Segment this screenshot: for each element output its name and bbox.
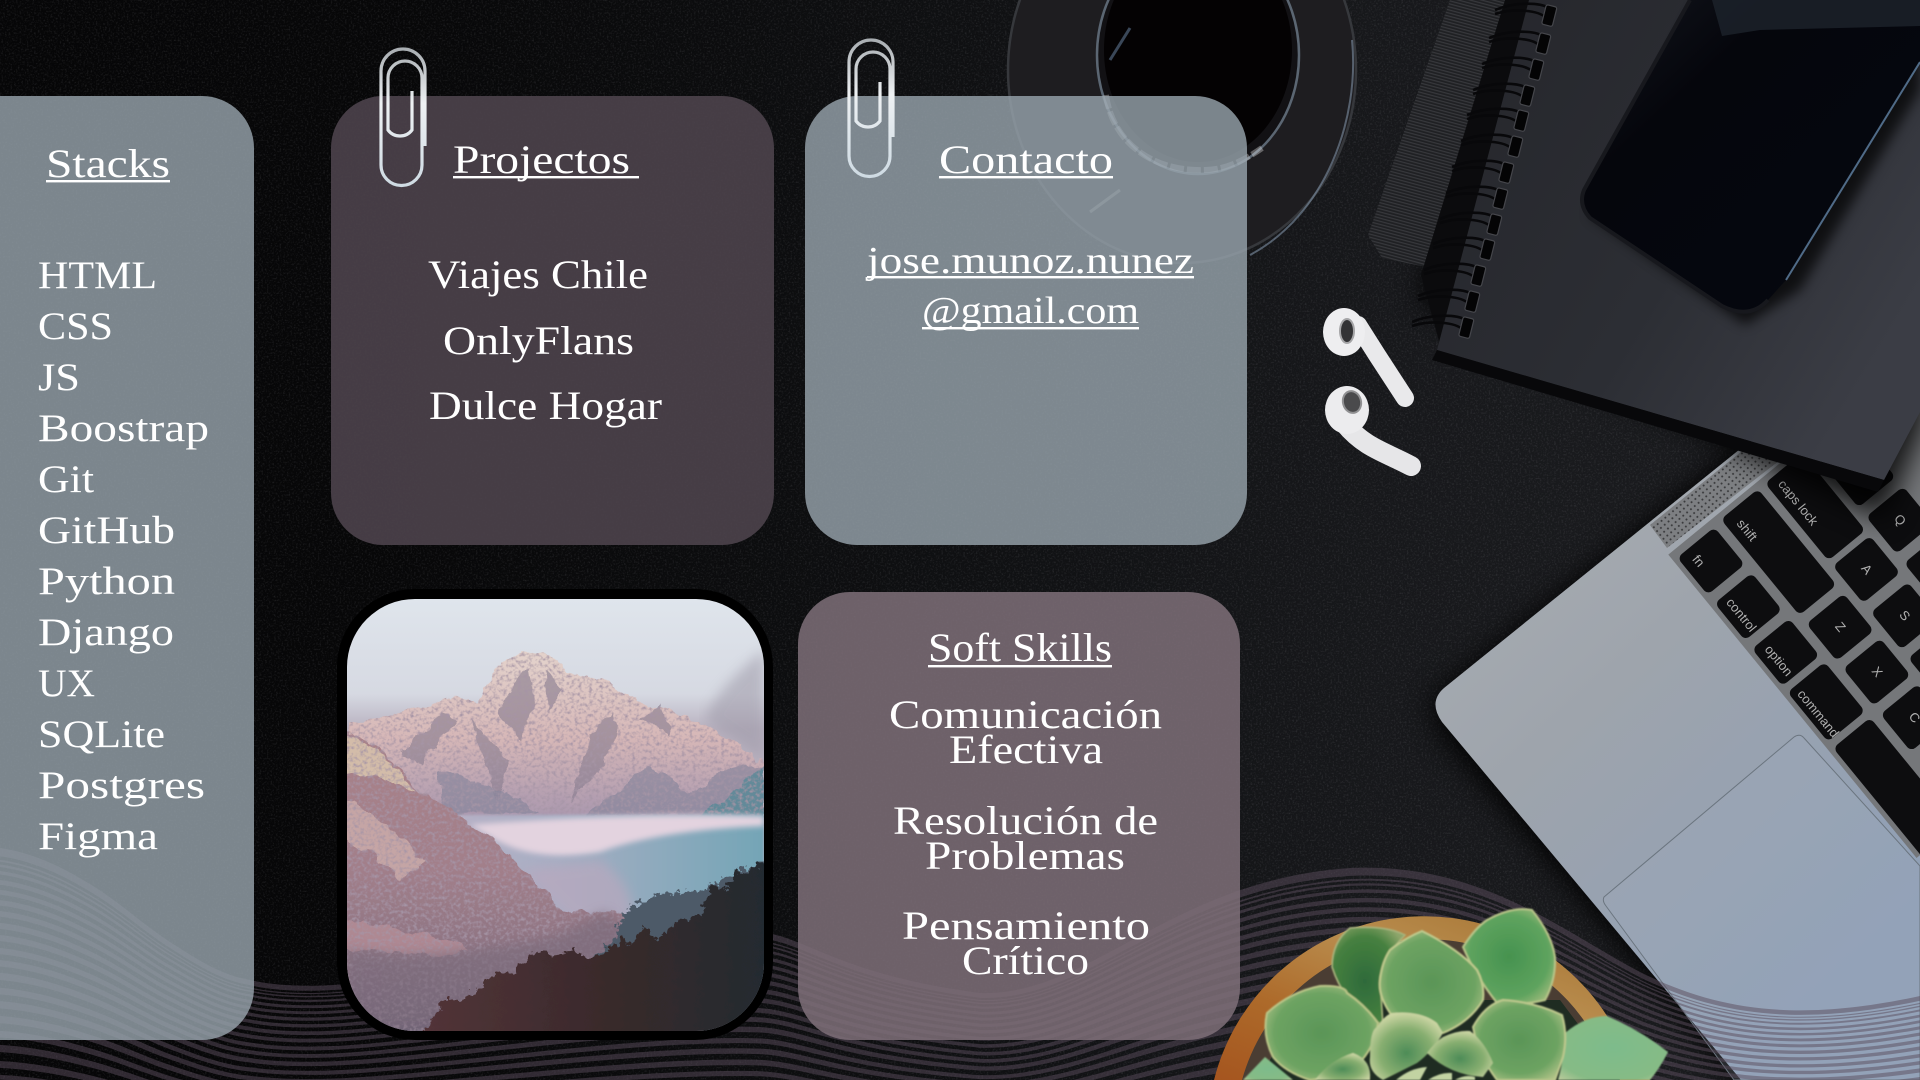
distant tree line xyxy=(590,860,764,1031)
keyboard keys: shift xyxy=(1734,516,1761,544)
panel: Projectos xyxy=(331,96,774,545)
photo: laptop with keyboard and trackpad xyxy=(1430,340,1920,1080)
heading: Contacto: Contacto xyxy=(939,137,1113,182)
fabric band xyxy=(1368,0,1512,268)
photo: smartphone xyxy=(1582,0,1920,325)
project list: Viajes Chile xyxy=(428,252,648,297)
keyboard keys: control xyxy=(1723,595,1760,635)
list of technologies: JS xyxy=(38,356,80,399)
panel: Contacto xyxy=(805,96,1247,545)
keyboard keys xyxy=(1668,372,1920,983)
keyboard keys: fn xyxy=(1689,552,1708,570)
keyboard keys: A xyxy=(1858,561,1876,577)
photo: wireless earbuds xyxy=(1323,308,1411,466)
heading: Stacks: Stacks xyxy=(46,141,170,186)
email address xyxy=(865,240,1194,332)
skill: Pensamiento Crítico: Pensamiento xyxy=(902,903,1150,948)
list of technologies: CSS xyxy=(38,305,113,348)
keyboard keys: command xyxy=(1794,687,1842,740)
spiral binding xyxy=(1412,4,1557,339)
skill: Resolución de Problemas: Problemas xyxy=(925,833,1125,878)
forested left slope xyxy=(340,728,625,1040)
list of technologies: Django xyxy=(38,611,174,654)
list of technologies: SQLite xyxy=(38,713,165,756)
keyboard keys: caps lock xyxy=(1775,477,1821,529)
skill: Comunicación Efectiva xyxy=(889,692,1162,772)
photo: spiral notebook xyxy=(1368,0,1920,520)
decorative wave band xyxy=(0,868,1920,1080)
speaker grille xyxy=(1650,447,1780,548)
heading: Projectos: Projectos xyxy=(453,137,630,182)
foreground dark forest xyxy=(420,862,770,1040)
email address: jose.munoz.nunez xyxy=(865,240,1194,282)
list of technologies xyxy=(38,254,209,858)
project list: OnlyFlans xyxy=(443,318,634,363)
icon: paperclip on Projectos xyxy=(381,49,425,185)
project list xyxy=(428,252,662,428)
skill: Resolución de Problemas xyxy=(893,798,1158,878)
trackpad xyxy=(1603,735,1920,1080)
succulent leaves xyxy=(1243,909,1668,1080)
mountain peak xyxy=(348,652,764,825)
project list: Dulce Hogar xyxy=(429,383,662,428)
keyboard keys: Z xyxy=(1832,619,1849,635)
list of technologies: Git xyxy=(38,458,94,501)
photo: coffee cup on saucer xyxy=(1008,0,1356,263)
sea of fog xyxy=(458,814,764,914)
skill: Comunicación Efectiva: Comunicación xyxy=(889,692,1162,737)
list of technologies: Figma xyxy=(38,815,158,858)
photo: mountain landscape in black rounded frame xyxy=(337,589,773,1040)
skill: Pensamiento Crítico: Crítico xyxy=(962,938,1089,983)
panel: Stacks xyxy=(0,96,254,1040)
keyboard keys: option xyxy=(1762,642,1796,679)
keyboard keys: S xyxy=(1896,607,1914,624)
heading: Soft Skills: Soft Skills xyxy=(928,625,1112,670)
list of technologies: Boostrap xyxy=(38,407,209,450)
list of technologies: UX xyxy=(38,662,95,705)
list of technologies: Postgres xyxy=(38,764,205,807)
skill: Resolución de Problemas: Resolución de xyxy=(893,798,1158,843)
email address: @gmail.com xyxy=(922,290,1139,332)
skill: Pensamiento Crítico xyxy=(902,903,1150,983)
list of technologies: HTML xyxy=(38,254,157,297)
photo: succulent plant in terracotta pot xyxy=(1214,909,1668,1080)
keyboard keys: X xyxy=(1869,664,1886,680)
panel: Soft Skills xyxy=(798,592,1240,1040)
icon: paperclip on Contacto xyxy=(849,40,893,176)
list of technologies: Python xyxy=(38,560,175,603)
list of technologies: GitHub xyxy=(38,509,175,552)
keyboard keys: Q xyxy=(1891,511,1909,529)
notebook cover xyxy=(1437,0,1920,480)
skill: Comunicación Efectiva: Efectiva xyxy=(949,727,1103,772)
